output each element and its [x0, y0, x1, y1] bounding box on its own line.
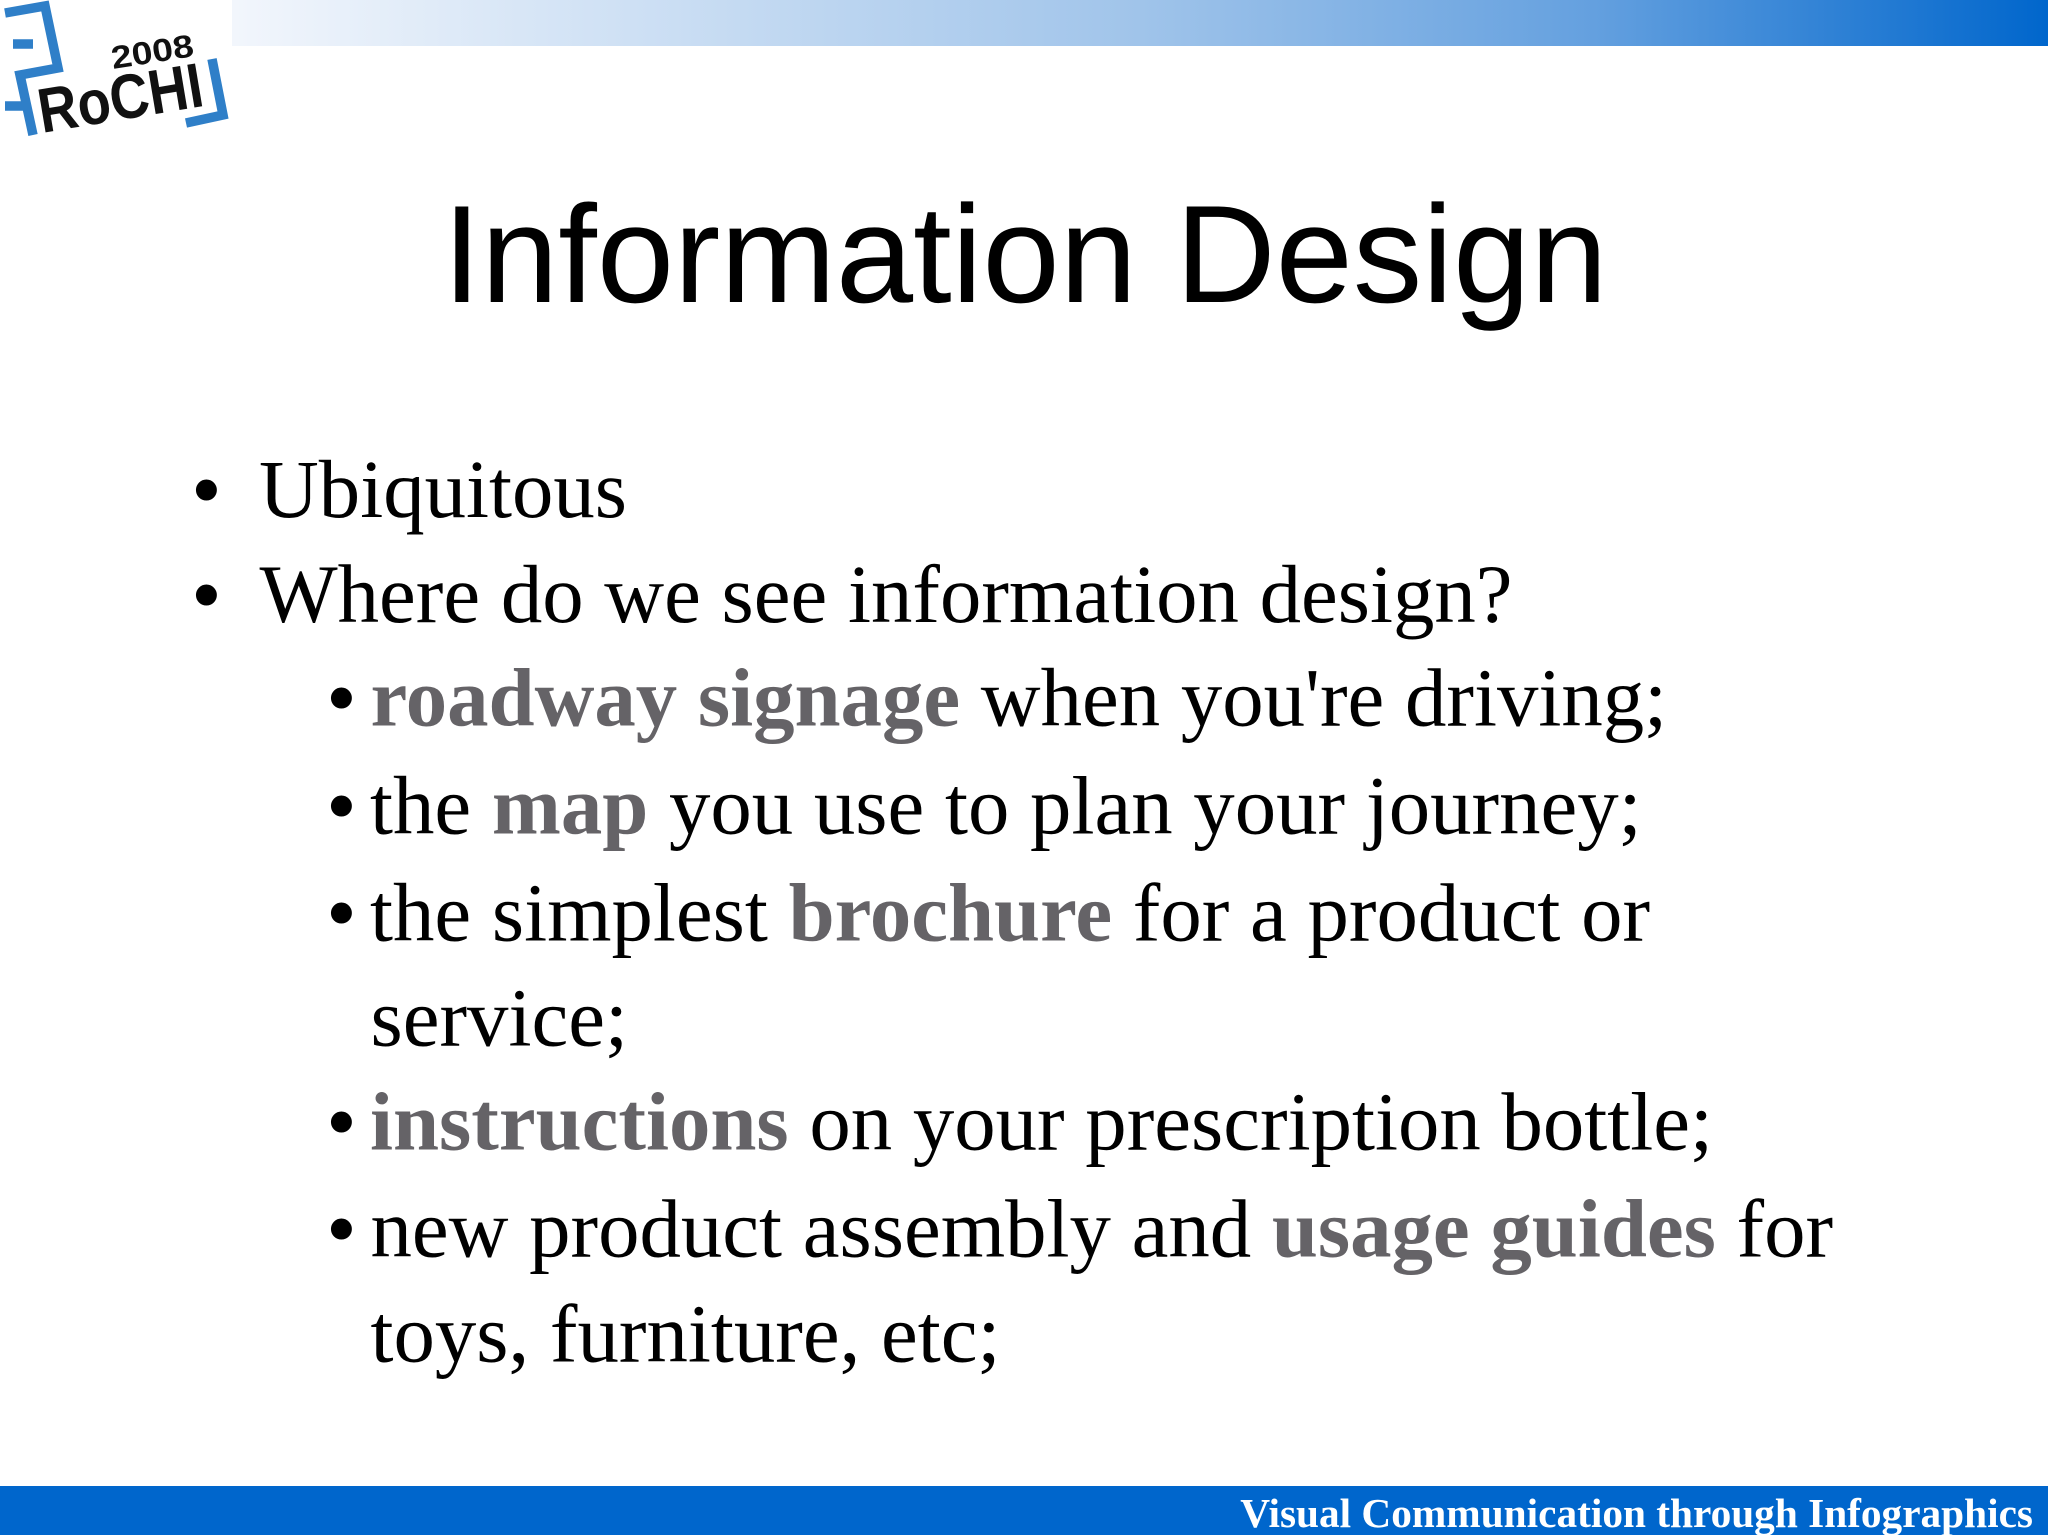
- bullet: Where do we see information design?: •: [191, 547, 222, 644]
- sub-bullet: map: the: [370, 760, 492, 852]
- top gradient bar: [232, 0, 2048, 46]
- footer text: Visual Communication through Infographics: [1240, 1490, 2033, 1535]
- sub-bullet: instructions: •: [326, 1074, 357, 1171]
- sub-bullet: brochure: service;: [370, 972, 628, 1064]
- sub-bullet: brochure: •: [326, 865, 357, 962]
- bullet: Ubiquitous: Ubiquitous: [259, 443, 627, 535]
- logo: RoCHI 2008: [5, 6, 223, 147]
- sub-bullet: roadway signage: •: [326, 650, 357, 747]
- title: Information Design: [443, 177, 1607, 332]
- sub-bullet: map: •: [326, 758, 357, 855]
- sub-bullet: roadway signage: roadway signage: [370, 652, 960, 744]
- sub-bullet: brochure: brochure for a product or: [789, 866, 1650, 958]
- sub-bullet: instructions: on your prescription bottle;: [789, 1076, 1713, 1168]
- sub-bullet: usage guides: •: [326, 1181, 357, 1278]
- sub-bullet: brochure: the simplest: [370, 866, 789, 958]
- footer bar: [0, 1486, 2048, 1535]
- bullet: Ubiquitous: •: [191, 442, 222, 539]
- sub-bullet: usage guides: new product assembly and: [370, 1182, 1272, 1274]
- sub-bullet: usage guides: usage guides for: [1272, 1182, 1833, 1274]
- logo: RoCHI 2008: RoCHI: [33, 50, 208, 147]
- bullet list: [191, 442, 1833, 1380]
- sub-bullet: roadway signage: when you're driving;: [960, 652, 1667, 744]
- bullet: Where do we see information design?: Where do we see information design?: [260, 548, 1512, 640]
- sub-bullet: map: map you use to plan your journey;: [492, 760, 1642, 852]
- sub-bullet: instructions: instructions: [370, 1076, 789, 1168]
- sub-bullet: usage guides: toys, furniture, etc;: [370, 1288, 1000, 1380]
- logo: RoCHI 2008: 2008: [108, 27, 196, 76]
